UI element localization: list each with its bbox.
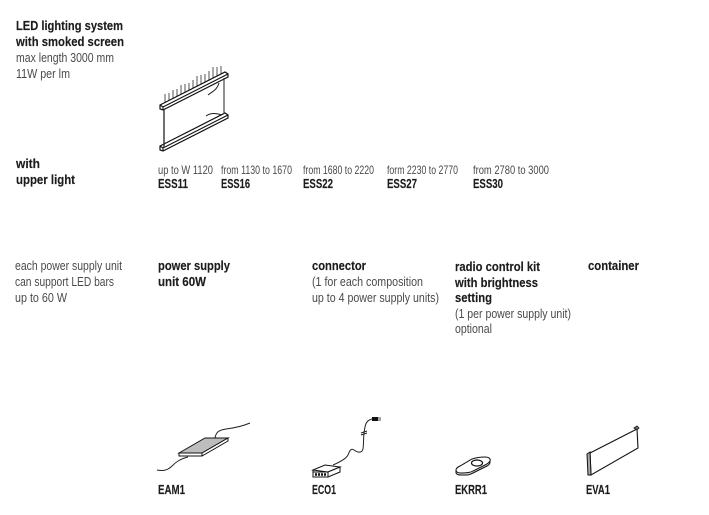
- icon: container: [587, 426, 639, 475]
- heading: connector: [312, 258, 439, 305]
- icon: power supply unit: [157, 423, 250, 471]
- icon: connector: [313, 417, 381, 477]
- heading: radio control kit: setting: [455, 290, 492, 305]
- size option: ESS22: from 1680 to 2220: [303, 163, 374, 177]
- code: EVA1: EVA1: [586, 482, 610, 497]
- text block: power supply note: up to 60 W: [15, 290, 68, 305]
- heading: radio control kit: (1 per power supply unit): [455, 306, 571, 321]
- size option: ESS30: [473, 163, 549, 191]
- size option: ESS16: ESS16: [221, 176, 250, 191]
- heading: power supply unit 60W: [158, 258, 231, 289]
- heading: power supply unit 60W: power supply: [158, 258, 231, 273]
- heading: connector: (1 for each composition: [312, 274, 423, 289]
- size option: ESS27: [387, 163, 458, 191]
- heading: power supply unit 60W: unit 60W: [158, 274, 207, 289]
- size option: ESS30: ESS30: [473, 176, 503, 191]
- code: EKRR1: EKRR1: [455, 482, 487, 497]
- size option: ESS11: up to W 1120: [158, 163, 213, 177]
- text block: power supply note: can support LED bars: [15, 274, 114, 289]
- icon: radio control: [456, 457, 490, 475]
- code: ECO1: ECO1: [312, 482, 336, 497]
- heading: radio control kit: radio control kit: [455, 259, 541, 274]
- size option: ESS22: [303, 163, 374, 191]
- heading: LED lighting system: [15, 18, 124, 81]
- size option: ESS11: [158, 163, 213, 191]
- size option: ESS27: form 2230 to 2770: [387, 163, 458, 177]
- heading: container: container: [588, 258, 639, 273]
- text block: power supply note: each power supply unit: [15, 258, 122, 273]
- size option: ESS22: ESS22: [303, 176, 333, 191]
- size option: ESS11: ESS11: [158, 176, 188, 191]
- heading: LED lighting system: LED lighting system: [16, 18, 123, 33]
- heading: LED lighting system: 11W per lm: [16, 66, 70, 81]
- heading: radio control kit: optional: [455, 321, 492, 336]
- heading: radio control kit: [454, 259, 571, 336]
- code: EAM1: EAM1: [158, 482, 185, 497]
- label: with upper light: upper light: [16, 172, 76, 187]
- size option: ESS30: from 2780 to 3000: [473, 163, 549, 177]
- label: with upper light: [15, 156, 76, 187]
- heading: LED lighting system: max length 3000 mm: [16, 50, 114, 65]
- text block: power supply note: [15, 258, 122, 305]
- heading: LED lighting system: with smoked screen: [15, 34, 124, 49]
- heading: radio control kit: with brightness: [454, 275, 538, 290]
- label: with upper light: with: [15, 156, 40, 171]
- illustration: LED bar with smoked screen: [160, 66, 228, 151]
- heading: connector: connector: [312, 258, 366, 273]
- size option: ESS16: [221, 163, 292, 191]
- size option: ESS16: from 1130 to 1670: [221, 163, 292, 177]
- heading: connector: up to 4 power supply units): [312, 290, 439, 305]
- size option: ESS27: ESS27: [387, 176, 417, 191]
